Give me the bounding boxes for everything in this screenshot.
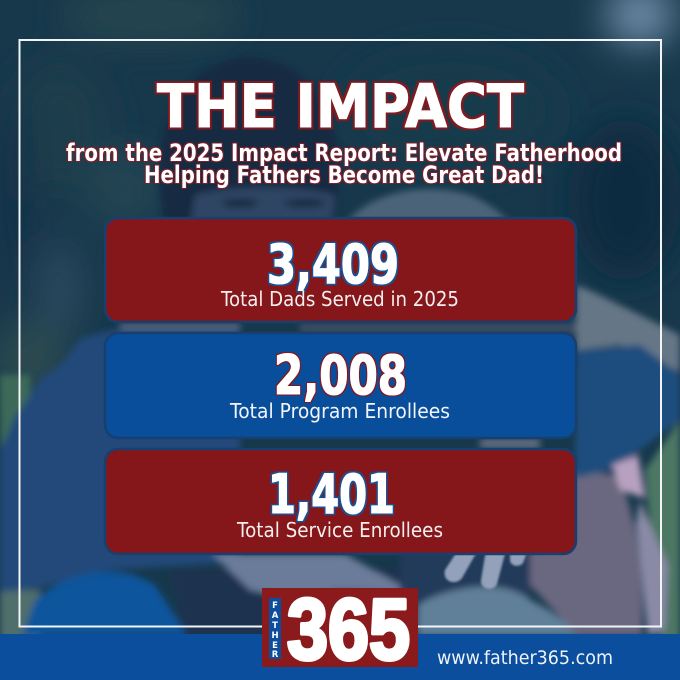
footer bar: [0, 634, 680, 680]
subtitle: Helping Fathers Become Great Dad!: [144, 161, 544, 189]
logo word: FATHER: F: [272, 601, 278, 611]
logo word: FATHER: R: [272, 650, 279, 660]
logo word: FATHER: T: [272, 621, 278, 631]
logo word: FATHER: E: [272, 641, 278, 651]
label: total dads served: Total Dads Served in 2025: [220, 287, 459, 311]
stat: 2,008: 2,008: [274, 344, 407, 407]
title: THE IMPACT: [157, 72, 524, 142]
subtitle: [66, 139, 622, 189]
website url: www.father365.com: [437, 647, 613, 669]
label: total service enrollees: Total Service Enrollees: [236, 518, 443, 542]
logo word: FATHER: A: [272, 611, 279, 621]
stat: 1,401: 1,401: [268, 463, 395, 526]
panel: total program enrollees: [105, 333, 576, 438]
logo: Father 365: [262, 582, 418, 678]
label: total program enrollees: Total Program Enrollees: [229, 399, 450, 423]
logo number: 365: 365: [287, 582, 410, 678]
logo word: FATHER: H: [271, 631, 279, 641]
stat: 3,409: 3,409: [267, 233, 399, 296]
panel: total service enrollees: [105, 449, 576, 554]
panel: total dads served: [105, 218, 576, 322]
logo word: FATHER: [271, 601, 279, 660]
